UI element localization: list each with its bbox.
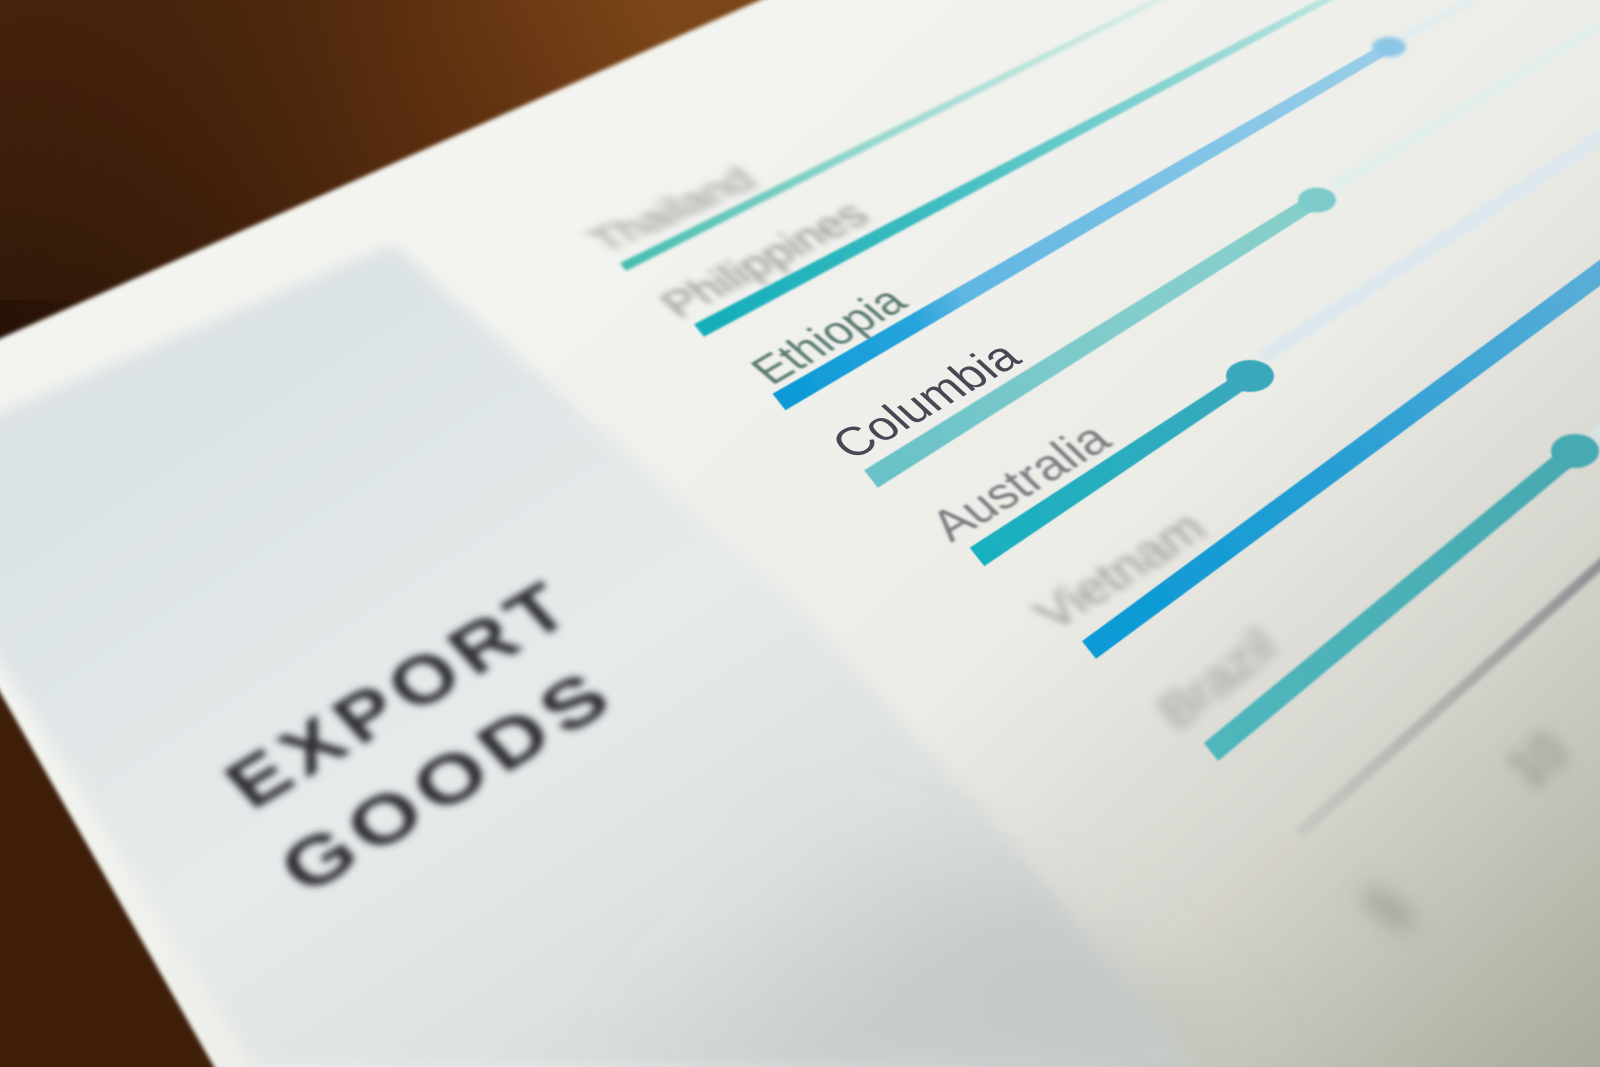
title: EXPORT GOODS: GOODS	[263, 653, 633, 908]
x axis line	[1295, 552, 1600, 838]
bar row: Philippines	[651, 0, 1346, 337]
bar row: Columbia	[821, 188, 1336, 488]
title: EXPORT GOODS	[209, 565, 633, 908]
title: EXPORT GOODS: EXPORT	[209, 565, 592, 823]
bar row: Thailand: Thailand	[579, 160, 765, 260]
bar row: Thailand	[579, 0, 1180, 271]
bar row: Brazil	[1147, 434, 1599, 761]
bar row: Brazil: Brazil	[1147, 617, 1287, 740]
bar row: Vietnam	[1022, 250, 1600, 659]
axis label: 10: 10	[1495, 720, 1579, 798]
panel: shaded title column	[0, 244, 1250, 1067]
bar row: Australia	[920, 360, 1274, 566]
bar row: Columbia: Columbia	[821, 332, 1032, 468]
axis label: 5: 5	[1352, 873, 1426, 944]
bar chart: export goods by country	[579, 0, 1600, 944]
bar row: Ethiopia	[740, 37, 1406, 410]
bar row: Philippines: Philippines	[651, 193, 879, 326]
bar row: Australia: Australia	[920, 414, 1122, 551]
bar row: Vietnam: Vietnam	[1022, 501, 1217, 640]
track: pale remainder of the bars	[1258, 0, 1600, 443]
bar row: Ethiopia: Ethiopia	[740, 278, 918, 393]
